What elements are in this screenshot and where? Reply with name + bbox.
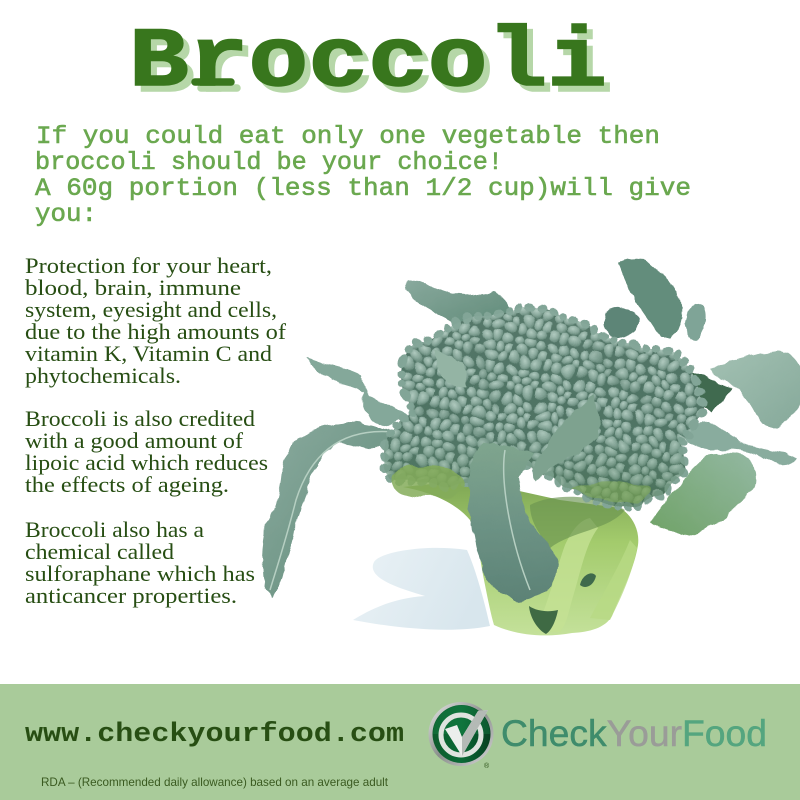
leaf: top left	[405, 278, 512, 326]
leaf: right underside	[690, 372, 732, 412]
paragraph: protection: system, eyesight and cells,	[25, 297, 277, 322]
front leaves	[434, 350, 599, 601]
paragraph: lipoic acid: with a good amount of	[25, 428, 244, 453]
stem: dark under head	[530, 497, 625, 548]
intro text: A 60g portion (less than 1/2 cup)will give	[35, 174, 691, 203]
leaf: top small	[685, 303, 707, 343]
leaf: right	[709, 351, 800, 428]
back leaves	[262, 258, 800, 598]
paragraph: sulforaphane: anticancer properties.	[25, 583, 237, 608]
paragraph: protection: blood, brain, immune	[25, 275, 241, 300]
leaf: round small	[604, 307, 639, 337]
paragraph: lipoic acid	[25, 406, 268, 497]
intro text: broccoli should be your choice!	[35, 148, 503, 177]
intro text: If you could eat only one vegetable then	[36, 122, 660, 151]
paragraph: protection: Protection for your heart,	[25, 253, 272, 278]
footer band	[0, 684, 800, 800]
illustration: broccoli	[262, 258, 800, 635]
paragraph: protection: phytochemicals.	[25, 363, 181, 388]
head shading creases	[415, 340, 680, 445]
paragraph: sulforaphane: chemical called	[25, 539, 174, 564]
stem: middle highlight	[535, 518, 598, 632]
footnote: RDA – (Recommended daily allowance) based on an average adult	[41, 775, 389, 789]
floret head	[384, 308, 701, 508]
vein: front leaf	[504, 450, 530, 590]
logo icon	[428, 702, 494, 770]
stem: base leaf scrap	[529, 606, 558, 634]
paragraph: lipoic acid: Broccoli is also credited	[25, 406, 255, 431]
leaf: left long	[262, 422, 393, 598]
leaf: top right	[618, 258, 682, 338]
leaf: middle	[534, 395, 599, 481]
logo icon: ®	[484, 762, 490, 770]
head green underside	[393, 465, 652, 503]
intro text	[35, 122, 691, 229]
vein: left long leaf	[270, 432, 393, 590]
logo wordmark: CheckYourFood	[501, 713, 767, 754]
paragraph: sulforaphane: Broccoli also has a	[25, 517, 204, 542]
paragraph: protection: due to the high amounts of	[25, 319, 287, 344]
leaf: lower right big	[649, 453, 756, 537]
paragraph: protection: vitamin K, Vitamin C and	[25, 341, 272, 366]
title: Broccoli	[135, 22, 613, 117]
paragraph: lipoic acid: the effects of ageing.	[25, 472, 229, 497]
stem: right highlight	[590, 540, 637, 620]
title: Broccoli	[129, 16, 607, 111]
leaf: big front	[468, 443, 558, 601]
leaf: small on head	[434, 350, 467, 388]
paragraph: sulforaphane	[25, 517, 255, 608]
website url: www.checkyourfood.com	[25, 720, 404, 750]
body text	[25, 253, 287, 608]
paragraph: sulforaphane: sulforaphane which has	[25, 561, 255, 586]
paragraph: lipoic acid: lipoic acid which reduces	[25, 450, 268, 475]
stems	[403, 480, 638, 635]
paragraph: protection	[25, 253, 287, 388]
intro text: you:	[35, 200, 97, 229]
ground shadow	[353, 548, 490, 630]
leaf: lower right	[680, 420, 798, 465]
leaf: upper left small	[305, 358, 408, 426]
stem: dark spot	[580, 573, 596, 587]
